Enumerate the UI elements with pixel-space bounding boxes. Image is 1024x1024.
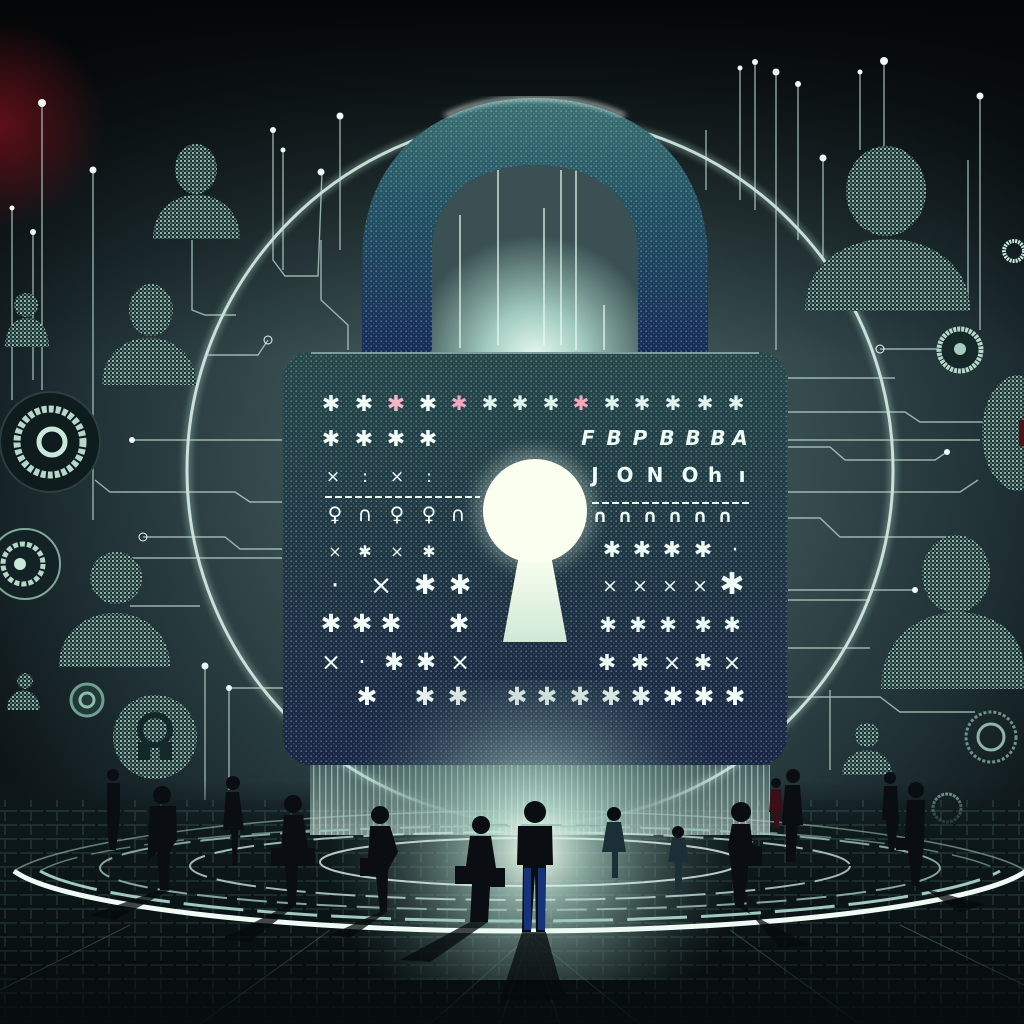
people silhouettes xyxy=(107,769,925,932)
silhouette: person 11 xyxy=(769,778,783,828)
right password glyphs: ∩∩∩∩∩∩ xyxy=(593,506,732,527)
circuit end nodes xyxy=(10,57,984,691)
user icons left xyxy=(5,144,240,710)
icon: small badge right xyxy=(933,794,961,822)
left password asterisks: ×·✱✱× xyxy=(321,648,470,676)
floor xyxy=(0,680,1024,1024)
left password asterisks: ×:×: xyxy=(326,467,432,487)
icon: right edge badge xyxy=(982,375,1024,491)
at-sign and badge icons left xyxy=(0,392,197,779)
right password glyphs xyxy=(581,426,748,676)
left password asterisks: ✱✱✱✱ xyxy=(321,609,469,638)
silhouette: person 13 xyxy=(882,772,899,852)
concentric floor rings xyxy=(14,811,1024,931)
keyhole xyxy=(475,450,595,642)
large glowing ring xyxy=(187,117,893,823)
icon: users lock badge xyxy=(113,695,197,779)
user icon: top right xyxy=(805,146,970,311)
right password glyphs: ✱✱×✱× xyxy=(598,651,741,676)
user icon: middle left xyxy=(102,284,196,385)
user icon: lower right xyxy=(881,535,1024,689)
top and bottom asterisk rows: ✱✱✱✱✱✱✱✱ xyxy=(482,391,744,415)
light beam below lock xyxy=(310,765,770,835)
left password asterisks: ✱✱✱ xyxy=(357,682,468,711)
right password glyphs: ✱✱✱✱✱ xyxy=(599,613,741,637)
right password glyphs: ×××× xyxy=(602,575,708,597)
padlock shackle xyxy=(362,98,708,355)
silhouette: person 2 xyxy=(148,786,177,890)
left password asterisks: ♀∩♀♀∩ xyxy=(328,502,465,526)
circuit lines xyxy=(12,60,1024,800)
icon: target badge right xyxy=(966,712,1016,762)
user icon: small far left xyxy=(5,293,49,347)
user icon: lower left xyxy=(59,552,170,667)
silhouette: person 5 with case xyxy=(360,806,398,912)
left password asterisks xyxy=(321,392,471,711)
user icons right xyxy=(805,146,1024,822)
top and bottom asterisk rows xyxy=(451,391,745,711)
top and bottom asterisk rows: ✱✱ xyxy=(451,391,589,415)
icon: keyhole badge xyxy=(939,329,981,371)
user icon: small right xyxy=(842,723,892,775)
silhouette: person 6 with case xyxy=(455,816,505,922)
person shadows xyxy=(90,885,985,1000)
right password glyphs: FBPBBBA xyxy=(581,426,748,450)
silhouette: person 10 with case xyxy=(728,802,762,906)
right password glyphs: ✱ xyxy=(719,567,745,602)
icon: small round badge xyxy=(71,684,103,716)
user icon: top left xyxy=(153,144,240,239)
left password asterisks: ✱✱✱ xyxy=(322,392,437,417)
silhouette: person 1 xyxy=(107,769,120,850)
silhouette: person 12 xyxy=(782,769,803,862)
left password asterisks: ✱ xyxy=(387,392,405,417)
icon: top right edge xyxy=(1004,241,1024,261)
silhouette: person 8 xyxy=(602,807,626,878)
top and bottom asterisk rows: ✱✱✱✱✱✱✱✱ xyxy=(507,682,745,711)
silhouette: person 3 xyxy=(223,776,244,865)
padlock body xyxy=(283,352,787,765)
left password asterisks: ·×✱✱ xyxy=(331,570,471,601)
user icon: tiny lower left xyxy=(7,673,40,710)
right password glyphs: ✱✱✱✱· xyxy=(603,538,738,563)
icon: target badge xyxy=(0,529,60,599)
silhouette: person 4 with case xyxy=(271,795,315,905)
silhouette: person 7 centre xyxy=(517,801,553,932)
silhouette: person 9 xyxy=(668,826,689,890)
left password asterisks: ✱✱✱✱ xyxy=(322,427,437,452)
left password asterisks: ×✱×✱ xyxy=(328,542,436,561)
right password glyphs: JONOhı xyxy=(589,463,745,487)
silhouette: person 14 with case xyxy=(896,782,925,885)
icon: at sign badge xyxy=(0,392,100,492)
